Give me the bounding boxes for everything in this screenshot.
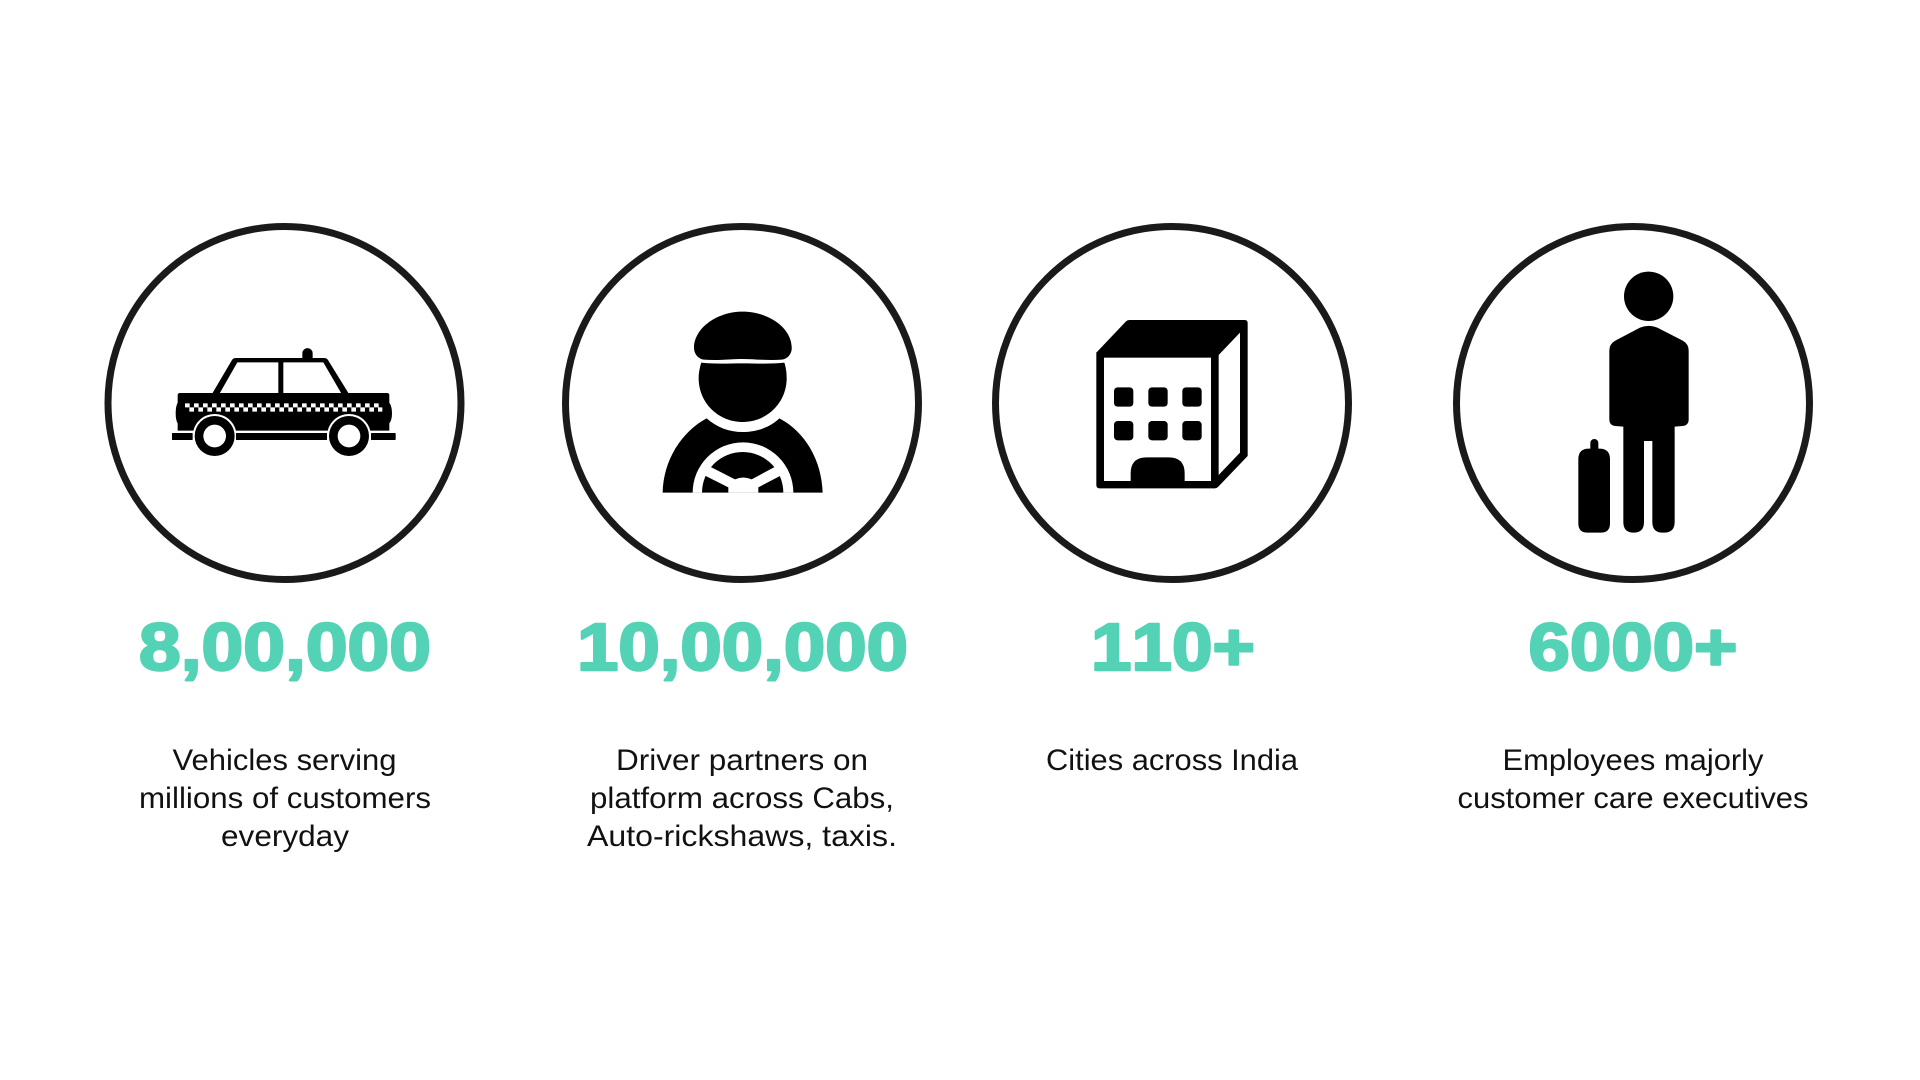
icon circle: cities	[996, 226, 1348, 580]
icon: building	[1096, 320, 1248, 488]
icon: person with suitcase	[1578, 272, 1689, 533]
description: employees	[1458, 744, 1808, 815]
icon circle: vehicles	[108, 226, 461, 580]
panel: employees	[1456, 226, 1810, 815]
icon circle: driver partners	[566, 226, 918, 580]
description: cities: Cities across India	[1046, 744, 1298, 777]
description: vehicles: Vehicles serving	[172, 744, 396, 777]
description: vehicles	[139, 744, 431, 853]
panel: vehicles	[108, 226, 461, 853]
icon: taxi car	[172, 348, 396, 458]
icon circle: employees	[1456, 226, 1810, 580]
icon: driver with steering wheel	[663, 312, 823, 493]
description: vehicles: everyday	[221, 820, 349, 853]
panel: cities	[996, 226, 1348, 777]
panel: driver partners	[566, 226, 918, 853]
description: driver partners	[587, 744, 897, 853]
statistic: 110+: 110+	[1091, 610, 1255, 685]
description: driver partners: Auto-rickshaws, taxis.	[587, 820, 897, 853]
description: employees: Employees majorly	[1502, 744, 1764, 777]
statistic: 10,00,000: 10,00,000	[577, 610, 908, 685]
statistic: 6000+: 6000+	[1528, 610, 1738, 685]
description: driver partners: Driver partners on	[616, 744, 868, 777]
statistic: 8,00,000: 8,00,000	[139, 610, 431, 685]
description: employees: customer care executives	[1458, 782, 1808, 815]
description: driver partners: platform across Cabs,	[590, 782, 894, 815]
description: vehicles: millions of customers	[139, 782, 431, 815]
